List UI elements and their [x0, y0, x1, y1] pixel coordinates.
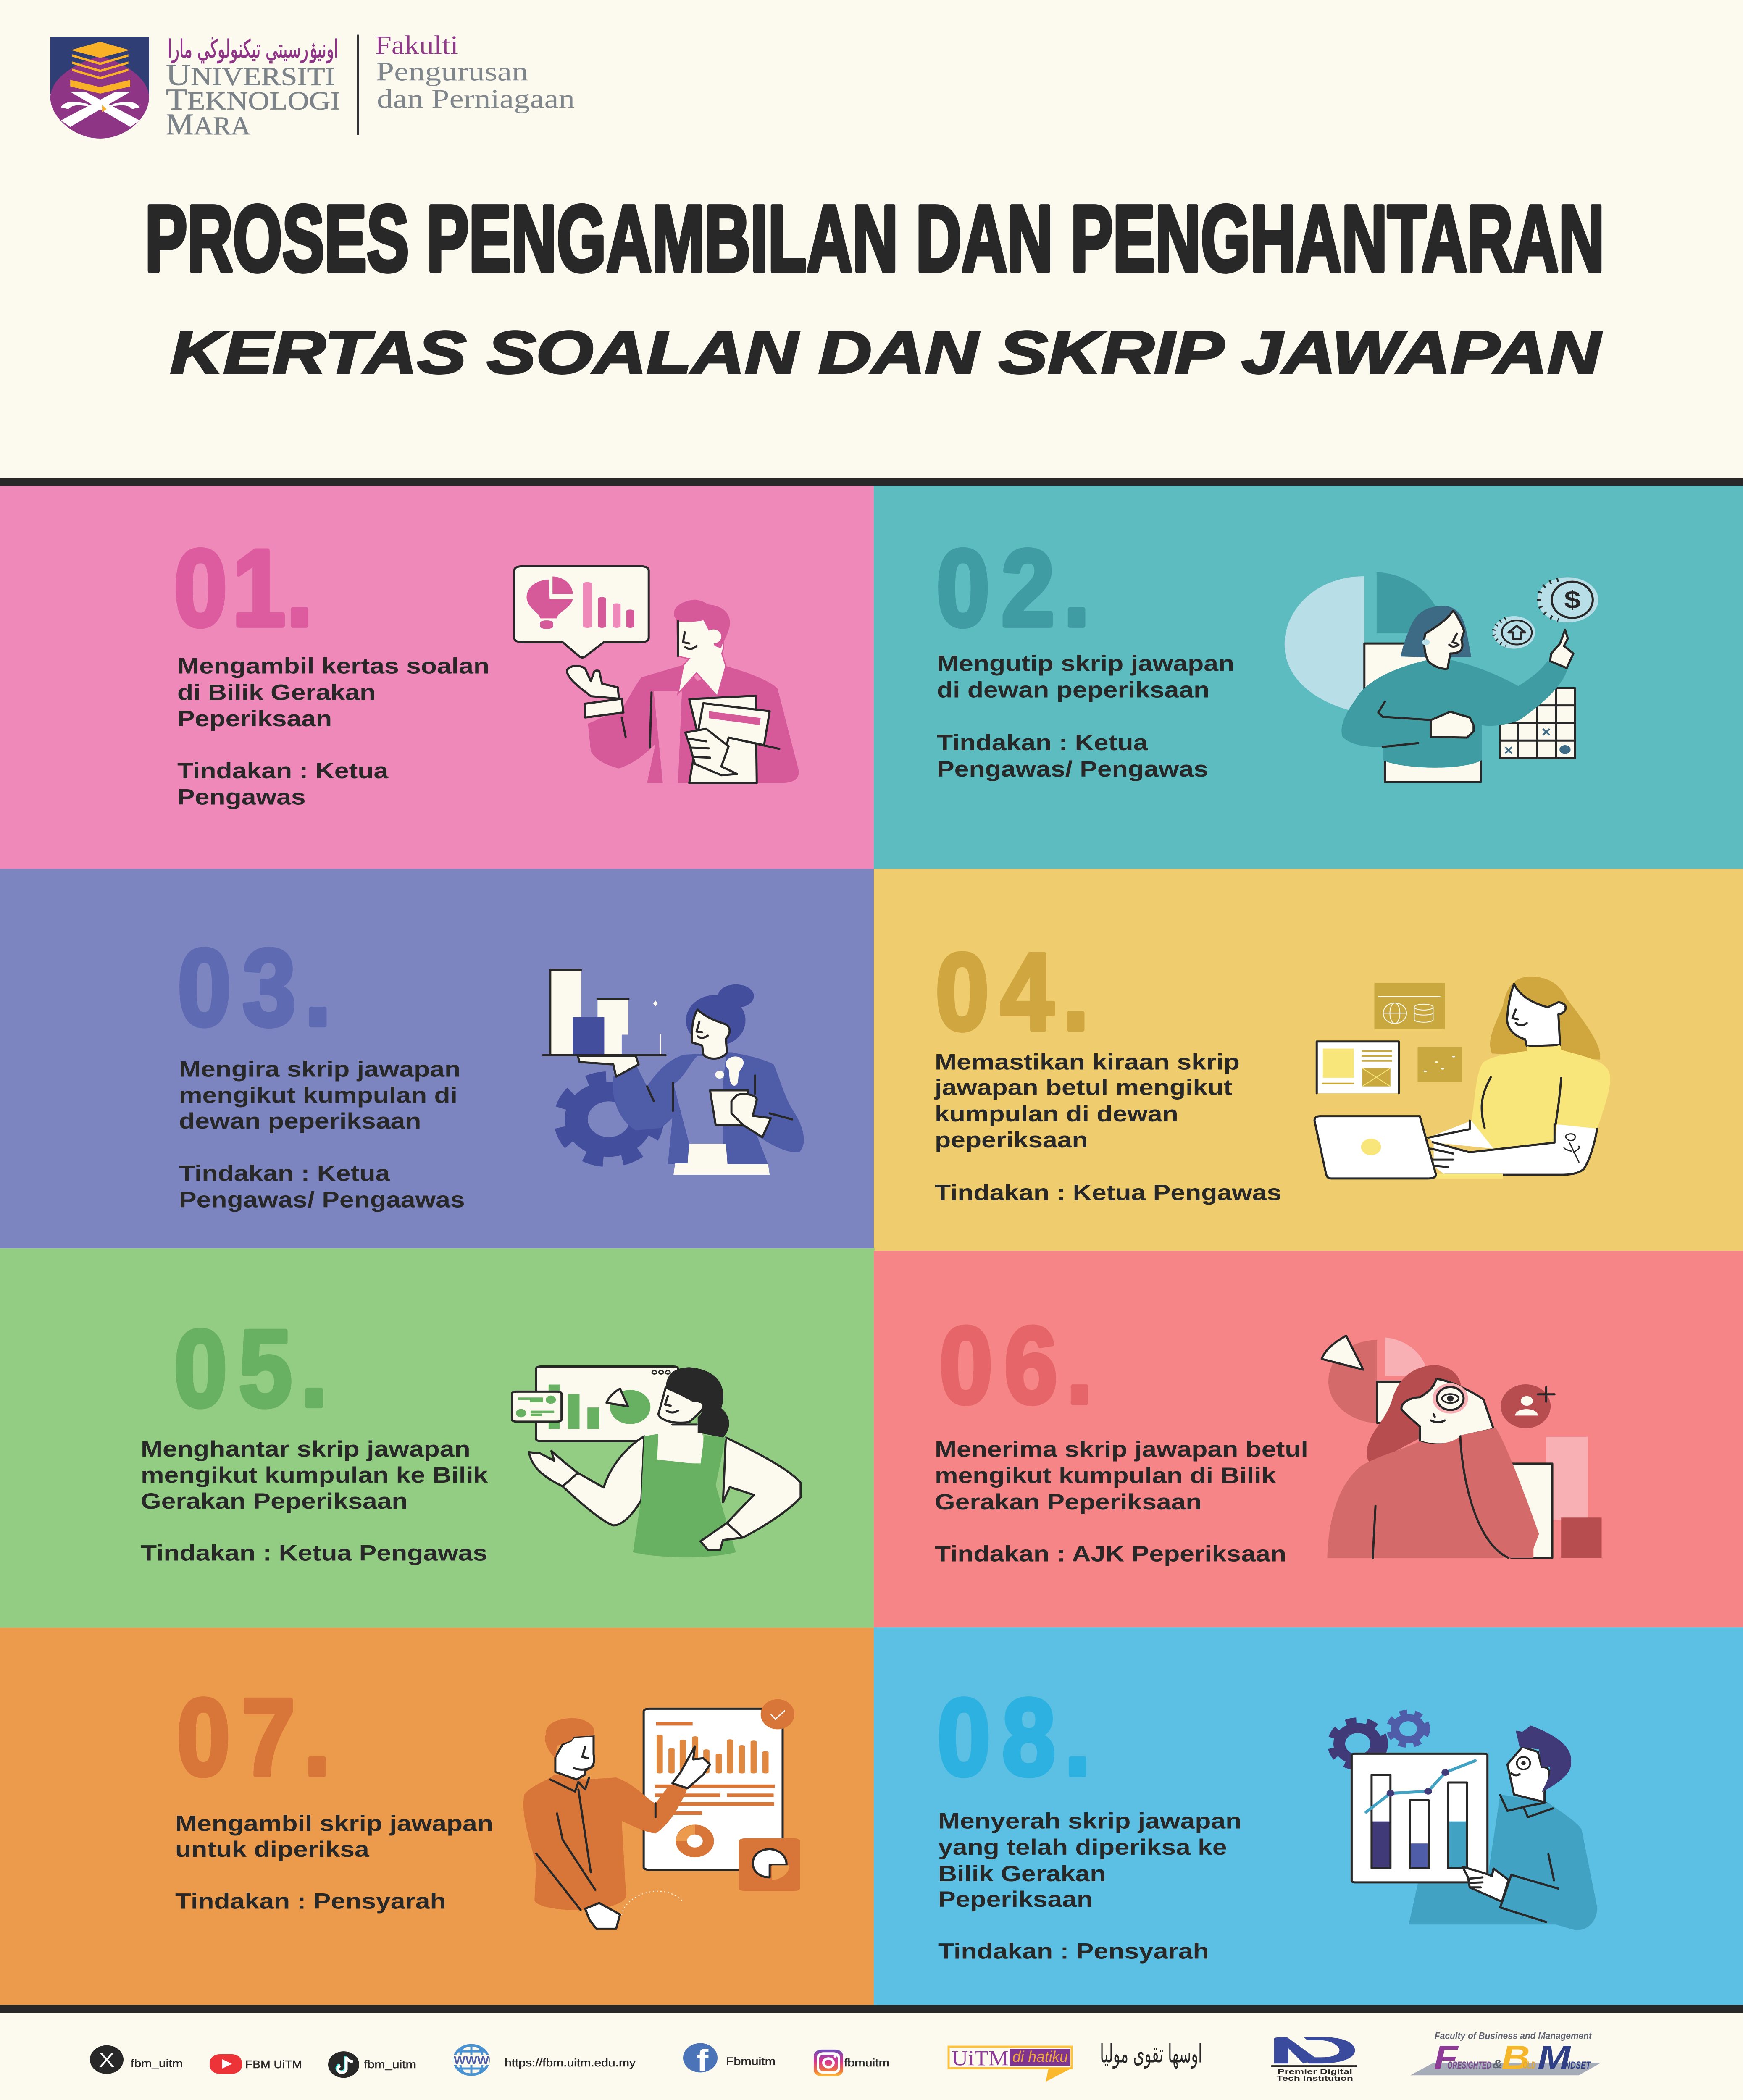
social: YouTube: FBM UiTM [245, 2058, 302, 2071]
social: TikTok [328, 2051, 416, 2078]
university name: MARA [166, 108, 250, 141]
university name: UNIVERSITI [166, 58, 335, 92]
description 04: Memastikan kiraan skrip [935, 1050, 1240, 1074]
social: website: WWW [454, 2054, 489, 2066]
illustration: man holding chart board with gears [1331, 1713, 1597, 1930]
description 07: Mengambil skrip jawapan [175, 1811, 493, 1836]
description 08: Bilik Gerakan [938, 1861, 1106, 1886]
logo: UiTM di hatiku: UiTM [952, 2046, 1009, 2070]
faculty name: Pengurusan [376, 57, 528, 86]
panel: step 02 [874, 486, 1743, 869]
icon: UiTM crest [50, 37, 149, 139]
number 03: 03. [178, 926, 331, 1048]
logo: Foresighted and Bold Mindset: OLD [1523, 2059, 1535, 2071]
description 04: peperiksaan [935, 1127, 1088, 1152]
logo: Premier Digital Tech Institution [1271, 2037, 1357, 2082]
faculty name: dan Perniagaan [377, 84, 575, 113]
description 06: Menerima skrip jawapan betul [935, 1437, 1308, 1462]
description 03: Pengawas/ Pengaawas [179, 1187, 465, 1212]
illustration: woman at laptop [1314, 976, 1610, 1179]
logo: Foresighted and Bold Mindset: ORESIGHTED [1447, 2059, 1491, 2071]
logo: Foresighted and Bold Mindset: F [1434, 2038, 1459, 2076]
number 04: 04. [936, 930, 1089, 1053]
description 06: mengikut kumpulan di Bilik [935, 1463, 1276, 1488]
illustration: woman pointing at coins [1285, 572, 1598, 782]
panel: step 07 [0, 1628, 875, 2005]
icon: dark gear [1331, 1721, 1384, 1766]
logo: Premier Digital Tech Institution: Premier Digital [1278, 2067, 1352, 2075]
logo: Foresighted and Bold Mindset: INDSET [1563, 2059, 1591, 2071]
illustration: man with speech bubble and papers [514, 566, 799, 783]
social: Facebook [683, 2043, 776, 2078]
university name [166, 58, 340, 141]
panel: step 05 [0, 1248, 875, 1628]
description 08: Menyerah skrip jawapan [938, 1809, 1241, 1834]
illustration: woman in apron presenting [512, 1367, 801, 1557]
description 05: Menghantar skrip jawapan [141, 1436, 471, 1462]
panel: step 04 [874, 869, 1743, 1251]
social: Facebook: Fbmuitm [726, 2055, 776, 2067]
motto in jawi: اوسها تقوى موليا [1100, 2039, 1202, 2069]
logo: Foresighted and Bold Mindset [1410, 2031, 1601, 2076]
faculty name [375, 31, 575, 113]
description 05: Gerakan Peperiksaan [141, 1489, 408, 1514]
logo: Premier Digital Tech Institution: Tech Institution [1277, 2074, 1353, 2082]
social: X [90, 2045, 183, 2074]
number 08: 08. [937, 1676, 1091, 1798]
description 03: mengikut kumpulan di [179, 1083, 457, 1108]
university name: TEKNOLOGI [166, 82, 340, 116]
description 07: untuk diperiksa [175, 1837, 370, 1862]
social: website: https://fbm.uitm.edu.my [505, 2057, 636, 2068]
number 07: 07. [177, 1676, 331, 1798]
panel: step 01 [0, 486, 875, 869]
panel: step 06 [874, 1251, 1743, 1627]
icon: dollar sign: $ [1564, 585, 1580, 614]
illustration: man pointing at report [523, 1699, 800, 1929]
description 01: di Bilik Gerakan [177, 680, 376, 705]
description 04: kumpulan di dewan [935, 1101, 1178, 1126]
subtitle: KERTAS SOALAN DAN SKRIP JAWAPAN [170, 319, 1602, 386]
description 01: Pengawas [177, 785, 306, 809]
description 05: Tindakan : Ketua Pengawas [141, 1541, 487, 1566]
panel: step 03 [0, 869, 875, 1248]
bottom divider bar [0, 2005, 1743, 2013]
icon: blue gear [1389, 1713, 1427, 1745]
logo: UiTM faculty logo [50, 31, 575, 141]
description 08: yang telah diperiksa ke [938, 1835, 1227, 1860]
description 03: Tindakan : Ketua [179, 1161, 390, 1186]
description 08: Peperiksaan [938, 1887, 1093, 1912]
social: Instagram: fbmuitm [844, 2057, 889, 2068]
number 02: 02. [936, 527, 1090, 649]
logo: Foresighted and Bold Mindset: B [1501, 2038, 1530, 2076]
logo: Foresighted and Bold Mindset: Faculty of Business and Management [1435, 2031, 1592, 2041]
social: Instagram [814, 2050, 889, 2076]
logo: Foresighted and Bold Mindset: M [1538, 2038, 1572, 2076]
divider [357, 35, 359, 135]
description 02: Pengawas/ Pengawas [937, 756, 1208, 782]
description 03: Mengira skrip jawapan [179, 1057, 460, 1082]
description 04: Tindakan : Ketua Pengawas [935, 1180, 1281, 1205]
description 06: Gerakan Peperiksaan [935, 1489, 1202, 1515]
number 05: 05. [174, 1307, 328, 1429]
description 01: Tindakan : Ketua [177, 758, 389, 783]
jawi university name: اونيۏرسيتي تيكنولوڬي مارا [168, 35, 338, 63]
icon: gear [560, 1078, 657, 1160]
social: X: fbm_uitm [131, 2058, 183, 2069]
footer: social links and logos [90, 2031, 1601, 2082]
social: YouTube [210, 2054, 302, 2074]
illustration: woman with magnifying glass [1322, 1336, 1602, 1558]
description 02: Mengutip skrip jawapan [937, 651, 1234, 676]
description 01: Mengambil kertas soalan [177, 654, 489, 679]
social: Facebook: f [697, 2043, 709, 2078]
logo: UiTM di hatiku [949, 2046, 1072, 2082]
description 03: dewan peperiksaan [179, 1108, 421, 1134]
panel: step 08 [874, 1627, 1743, 2005]
number 06: 06. [939, 1304, 1093, 1426]
description 01: Peperiksaan [177, 706, 332, 731]
description 07: Tindakan : Pensyarah [175, 1889, 446, 1914]
description 05: mengikut kumpulan ke Bilik [141, 1462, 488, 1488]
logo: Foresighted and Bold Mindset: & [1492, 2057, 1503, 2071]
social: TikTok: fbm_uitm [364, 2058, 416, 2071]
top divider bar [0, 478, 1743, 486]
faculty name: Fakulti [375, 31, 458, 60]
description 04: jawapan betul mengikut [934, 1075, 1232, 1100]
illustration: woman with gear and chart tray [543, 970, 804, 1175]
social: X: X [99, 2049, 115, 2071]
description 02: di dewan peperiksaan [937, 677, 1209, 703]
description 08: Tindakan : Pensyarah [938, 1939, 1209, 1964]
logo: UiTM di hatiku: di hatiku [1012, 2049, 1068, 2065]
social: website [453, 2045, 636, 2075]
number 01: 01. [174, 527, 313, 649]
description 02: Tindakan : Ketua [937, 730, 1148, 755]
description 06: Tindakan : AJK Peperiksaan [935, 1541, 1286, 1566]
